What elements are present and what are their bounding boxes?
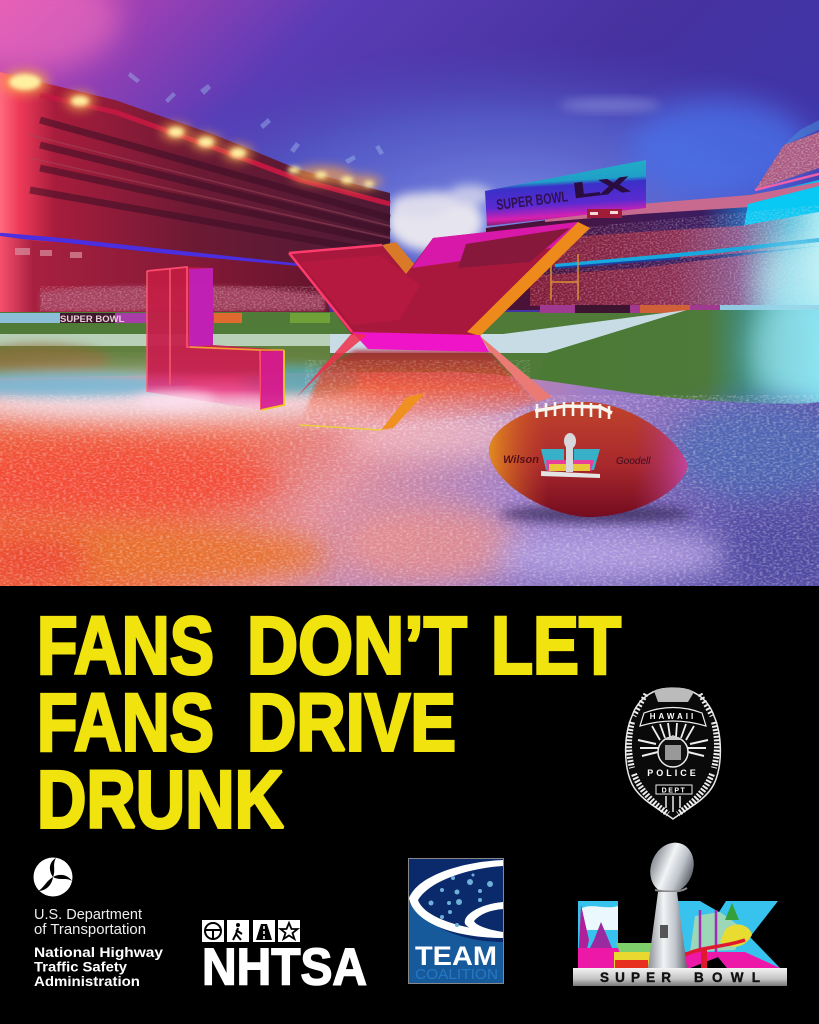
headline: FANS bbox=[37, 600, 214, 692]
clouds bbox=[387, 185, 492, 252]
logo: Hawaii Police Department badge: POLICE bbox=[647, 768, 699, 778]
headline bbox=[37, 600, 621, 846]
headline: DRIVE bbox=[247, 678, 456, 768]
logo: Team Coalition: TEAM bbox=[415, 941, 497, 971]
logo: U.S. DOT and NHTSA text bbox=[34, 858, 163, 989]
scoreboard: SUPER BOWL bbox=[495, 188, 569, 214]
football: Goodell bbox=[616, 456, 651, 467]
letter L bbox=[578, 901, 652, 968]
football bbox=[489, 402, 690, 523]
logo: Super Bowl LX bbox=[573, 836, 787, 986]
sideline banners: SUPER BOWL bbox=[60, 314, 125, 325]
scoreboard: LX bbox=[572, 173, 630, 203]
headline: DRUNK bbox=[37, 754, 284, 846]
logo: U.S. DOT and NHTSA text: of Transportation bbox=[34, 922, 146, 938]
left stadium stand bbox=[0, 72, 390, 313]
logo: U.S. DOT and NHTSA text: National Highway bbox=[34, 945, 163, 960]
logo: U.S. DOT and NHTSA text: U.S. Department bbox=[34, 907, 142, 923]
sky bbox=[0, 0, 819, 320]
headline: FANS bbox=[37, 678, 214, 768]
giant letter L bbox=[135, 267, 284, 410]
logo: U.S. DOT and NHTSA text: Traffic Safety bbox=[34, 960, 127, 974]
base: super bowl: BOWL bbox=[694, 970, 760, 985]
icon: pedestrian bbox=[227, 920, 249, 942]
photo: stadium scene with giant LX and football bbox=[0, 0, 819, 590]
logo: Hawaii Police Department badge: DEPT bbox=[662, 788, 686, 794]
headline: LET bbox=[491, 600, 621, 692]
trophy bbox=[643, 836, 701, 968]
field bbox=[0, 290, 819, 432]
icon: DOT triskelion bbox=[34, 858, 72, 896]
right stadium stand bbox=[486, 120, 819, 322]
headline: DON’T bbox=[247, 600, 467, 692]
logo: Team Coalition bbox=[408, 858, 504, 984]
logo: Team Coalition: COALITION bbox=[415, 966, 498, 983]
sideline banners bbox=[0, 305, 819, 325]
letter X bbox=[678, 901, 780, 968]
stadium lights bbox=[1, 69, 382, 189]
scoreboard bbox=[485, 160, 646, 226]
logo: Hawaii Police Department badge bbox=[626, 687, 720, 819]
icon: star bbox=[278, 920, 300, 942]
logo: NHTSA: NHTSA bbox=[202, 938, 367, 996]
base: super bowl: SUPER bbox=[600, 970, 671, 985]
giant letter X bbox=[289, 222, 590, 430]
ball logo bbox=[541, 433, 600, 478]
icon: road bbox=[253, 920, 275, 942]
logo: U.S. DOT and NHTSA text: Administration bbox=[34, 974, 140, 989]
turf foreground bbox=[0, 366, 819, 590]
football: Wilson bbox=[503, 454, 539, 466]
logo: Hawaii Police Department badge: HAWAII bbox=[650, 712, 696, 721]
icon: steering wheel bbox=[202, 920, 224, 942]
base: super bowl bbox=[573, 968, 787, 986]
